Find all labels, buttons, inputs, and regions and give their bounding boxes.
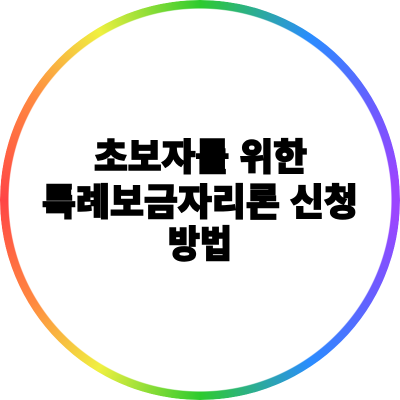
title line 2: 특례보금자리론 신청 xyxy=(42,182,358,223)
title line 1: 초보자를 위한 xyxy=(94,137,307,178)
title line 3: 방법 xyxy=(168,224,232,265)
